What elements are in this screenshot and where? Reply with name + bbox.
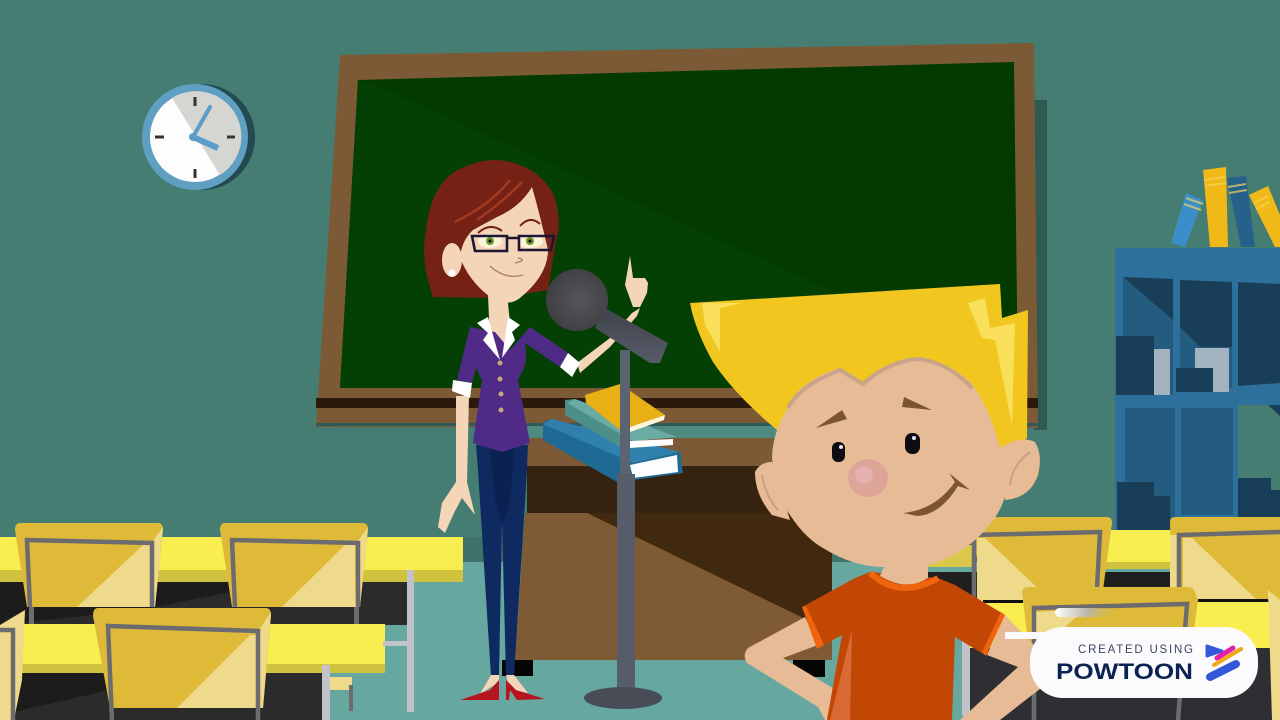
teacher hair streaks bbox=[455, 180, 522, 222]
teacher cuffs bbox=[452, 353, 580, 398]
teacher collar bbox=[477, 317, 520, 360]
teacher hair back bbox=[424, 160, 559, 298]
Powtoon badge bbox=[1030, 627, 1258, 698]
boy hairline bbox=[788, 359, 972, 408]
boy bbox=[690, 284, 1048, 720]
stack of books bbox=[543, 384, 683, 482]
teacher jacket bbox=[457, 327, 568, 452]
bookshelf bbox=[1115, 248, 1280, 530]
boy smile bbox=[903, 473, 970, 516]
boy hair bbox=[690, 284, 1028, 457]
microphone and stand bbox=[546, 269, 668, 709]
teacher neck bbox=[488, 295, 512, 362]
books on the shelf bbox=[1171, 167, 1280, 247]
boy right arm bbox=[960, 615, 1048, 720]
white motion streaks bbox=[1005, 608, 1121, 639]
teacher face bbox=[460, 187, 548, 303]
blue book bbox=[543, 419, 683, 482]
boy shirt bbox=[802, 572, 1005, 720]
wall clock bbox=[142, 84, 255, 190]
teacher ear and earring bbox=[442, 243, 462, 277]
boy nose bbox=[848, 459, 888, 497]
boy eyes bbox=[832, 433, 920, 462]
boy head bbox=[772, 357, 1008, 568]
boy ears bbox=[755, 440, 1040, 520]
teacher's desk bbox=[502, 426, 832, 677]
teacher buttons bbox=[498, 360, 504, 412]
created using text: CREATED USING bbox=[1078, 644, 1193, 656]
partial chair far left bbox=[0, 610, 25, 720]
chalkboard bbox=[316, 43, 1047, 430]
powtoon icon bbox=[1207, 646, 1241, 677]
boy collar bbox=[870, 573, 938, 588]
teacher bbox=[424, 160, 648, 700]
teacher smile bbox=[490, 258, 523, 276]
boy neck bbox=[880, 560, 928, 585]
teal book bbox=[565, 399, 677, 448]
teacher hand bbox=[625, 256, 648, 307]
floor bbox=[0, 562, 1280, 720]
teacher legs bbox=[476, 445, 528, 677]
right side desks and chairs bbox=[925, 517, 1280, 720]
boy eyebrows bbox=[816, 397, 932, 428]
boy hair highlights bbox=[702, 298, 1015, 425]
teacher shoes bbox=[460, 675, 545, 700]
yellow book bbox=[585, 384, 665, 432]
back row chair 2 bbox=[220, 523, 368, 625]
front row chair bbox=[93, 608, 271, 720]
teacher glasses and eyes bbox=[472, 220, 554, 251]
powtoon wordmark: POWTOON bbox=[1056, 659, 1193, 684]
back row chair 1 bbox=[15, 523, 163, 625]
teacher left arm bbox=[438, 396, 475, 533]
boy left arm bbox=[745, 617, 840, 720]
teacher raised arm bbox=[577, 308, 640, 373]
front row desk left bbox=[0, 624, 408, 720]
back row desk left bbox=[0, 537, 463, 712]
